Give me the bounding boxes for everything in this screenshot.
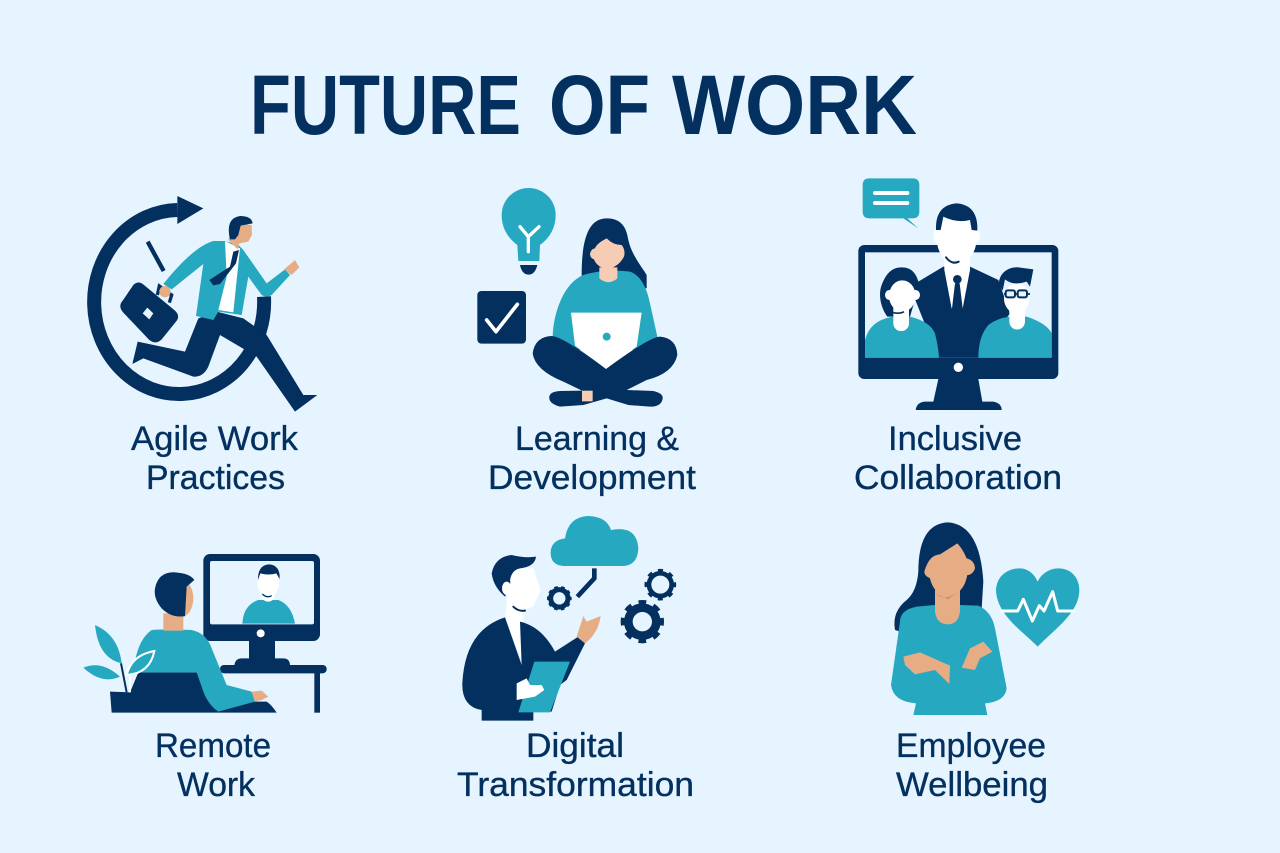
icon: woman with crossed arms and heart rate heart: [891, 522, 1079, 715]
label: learning and development: Learning &: [515, 420, 679, 458]
icon: video call on monitor with speech bubble: [858, 178, 1058, 410]
label: inclusive collaboration: Collaboration: [854, 459, 1062, 497]
title: [250, 58, 917, 152]
label: agile work practices: Practices: [146, 459, 285, 497]
panel: digital transformation: [457, 516, 694, 804]
panel: learning and development: [477, 188, 697, 497]
label: inclusive collaboration: [854, 420, 1062, 497]
panel: employee wellbeing: [891, 522, 1079, 804]
label: learning and development: [488, 420, 697, 497]
label: employee wellbeing: Wellbeing: [896, 766, 1048, 804]
label: employee wellbeing: [896, 727, 1048, 804]
panel: agile work practices: [94, 196, 317, 497]
label: remote work: [155, 727, 271, 804]
icon: person at desk on a video call: [83, 554, 327, 713]
title: WORK: [672, 58, 917, 152]
label: digital transformation: Digital: [526, 727, 624, 765]
icon: running businessman with circular arrow: [94, 196, 317, 412]
panel: inclusive collaboration: [854, 178, 1062, 497]
label: remote work: Work: [177, 766, 256, 804]
icon: woman with laptop, bulb and checkbox: [477, 188, 677, 407]
label: digital transformation: [457, 727, 694, 804]
panel: remote work: [83, 554, 327, 804]
label: agile work practices: [131, 420, 299, 497]
icon: man with tablet, cloud and gears: [462, 516, 675, 721]
label: agile work practices: Agile Work: [131, 420, 299, 458]
label: digital transformation: Transformation: [457, 766, 694, 804]
label: inclusive collaboration: Inclusive: [888, 420, 1022, 458]
label: employee wellbeing: Employee: [896, 727, 1046, 765]
title: OF: [549, 58, 650, 152]
label: remote work: Remote: [155, 727, 271, 765]
title: FUTURE: [250, 58, 521, 152]
label: learning and development: Development: [488, 459, 697, 497]
